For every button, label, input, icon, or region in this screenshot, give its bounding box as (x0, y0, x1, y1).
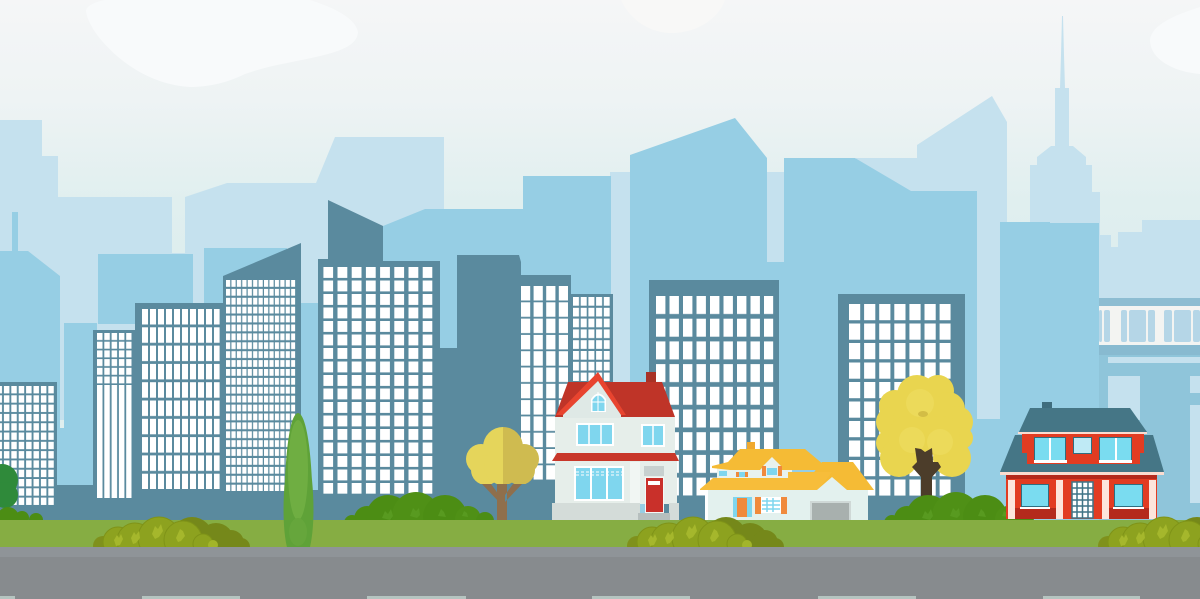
front window (755, 497, 787, 514)
back skyline (0, 16, 1200, 420)
mid block 2 (98, 254, 193, 324)
clouds (86, 0, 1200, 87)
columns (1008, 480, 1156, 519)
eaves (1000, 472, 1164, 475)
dormer wall (1022, 434, 1144, 464)
tower 4 (223, 243, 301, 520)
plinths (1015, 508, 1057, 519)
chimney (747, 442, 755, 450)
elevated bridge (1099, 298, 1200, 520)
mid block 4 (301, 303, 318, 493)
eave strip (1018, 432, 1147, 434)
tower 5 (318, 200, 440, 520)
foundation (552, 503, 679, 520)
back buildings right (1099, 220, 1200, 300)
crown left (466, 427, 503, 484)
dormer windows (1034, 437, 1132, 463)
door panel (644, 466, 664, 476)
bridge deck (1099, 306, 1200, 345)
olive bush 1 (93, 517, 250, 559)
asphalt (0, 557, 1200, 599)
red roof house (552, 372, 679, 520)
cloud: top centre (621, 0, 725, 33)
lane markings (0, 596, 1140, 599)
bridge underside (1099, 345, 1200, 355)
cypress tree (284, 413, 313, 547)
crown (876, 375, 973, 477)
lower windows (1020, 484, 1144, 509)
lawn (0, 520, 1200, 547)
upper floor (717, 468, 792, 490)
green bush centre (344, 492, 494, 540)
big yellow tree (876, 375, 973, 505)
low base 2 (301, 490, 318, 520)
middle skyline (0, 118, 1099, 520)
porch post (705, 490, 708, 520)
mid block centre left (383, 176, 611, 520)
green bush right (884, 492, 1034, 540)
olive bush 2 (627, 517, 784, 559)
front door (1072, 482, 1093, 518)
back buildings centre (610, 172, 790, 420)
upper roof (712, 449, 830, 470)
upper wall (555, 417, 675, 455)
mid building far left with antenna (0, 212, 60, 500)
gable above garage (817, 477, 847, 490)
main roof (555, 382, 675, 417)
mid blocks centre right (630, 118, 1099, 520)
wall band (1006, 475, 1157, 479)
lower roof (700, 472, 832, 490)
lower window (574, 466, 624, 501)
pillar openings (1108, 357, 1200, 503)
yellow roof house (700, 442, 874, 521)
low base (57, 485, 93, 520)
green tree left (0, 464, 18, 508)
road (0, 547, 1200, 599)
upper windows (576, 423, 665, 447)
front door (733, 497, 752, 517)
sky background (0, 0, 1200, 300)
lower wall (1006, 475, 1157, 519)
gable window (591, 392, 606, 412)
tower 6 block (440, 255, 613, 520)
foreground office buildings (0, 200, 965, 520)
cloud: left large (86, 0, 358, 87)
cloud: top right (1150, 7, 1200, 74)
right wing roof (800, 462, 874, 490)
bridge windows (1099, 310, 1200, 342)
tower 2 (93, 330, 135, 520)
yellow round tree (466, 427, 539, 521)
chimney (646, 372, 656, 384)
crown right (503, 427, 539, 484)
trunk (912, 448, 941, 505)
garage door (810, 501, 851, 521)
green bush left (0, 507, 43, 529)
small upper windows (719, 471, 748, 477)
dormer (762, 457, 782, 477)
tower 6 windows right (573, 297, 610, 381)
chimney (1042, 402, 1052, 409)
mid strip (57, 428, 93, 488)
door (645, 477, 664, 514)
tower 7 (649, 280, 779, 520)
olive bush 3 (1098, 517, 1200, 559)
teal roof red house (1000, 402, 1164, 519)
tower 1 (0, 382, 57, 520)
bridge pillars (1099, 355, 1200, 520)
mid block 3 (204, 248, 287, 348)
mid roof band (552, 453, 679, 461)
curb (0, 547, 1200, 557)
lower roof (1000, 435, 1164, 472)
bridge top rail (1099, 298, 1200, 306)
trunk and branches (482, 484, 522, 521)
tower 3 (135, 303, 223, 520)
porch column (630, 462, 640, 504)
gable (556, 372, 626, 415)
mid low block (64, 323, 97, 493)
back buildings left (0, 120, 444, 420)
steps (638, 513, 670, 520)
upper roof (1019, 408, 1147, 432)
tower 8 (838, 294, 965, 520)
lower wall (555, 460, 677, 504)
back strip (977, 190, 1000, 419)
tower 6 windows left (521, 286, 568, 480)
body (705, 488, 868, 521)
back tower with spire (856, 16, 1110, 300)
